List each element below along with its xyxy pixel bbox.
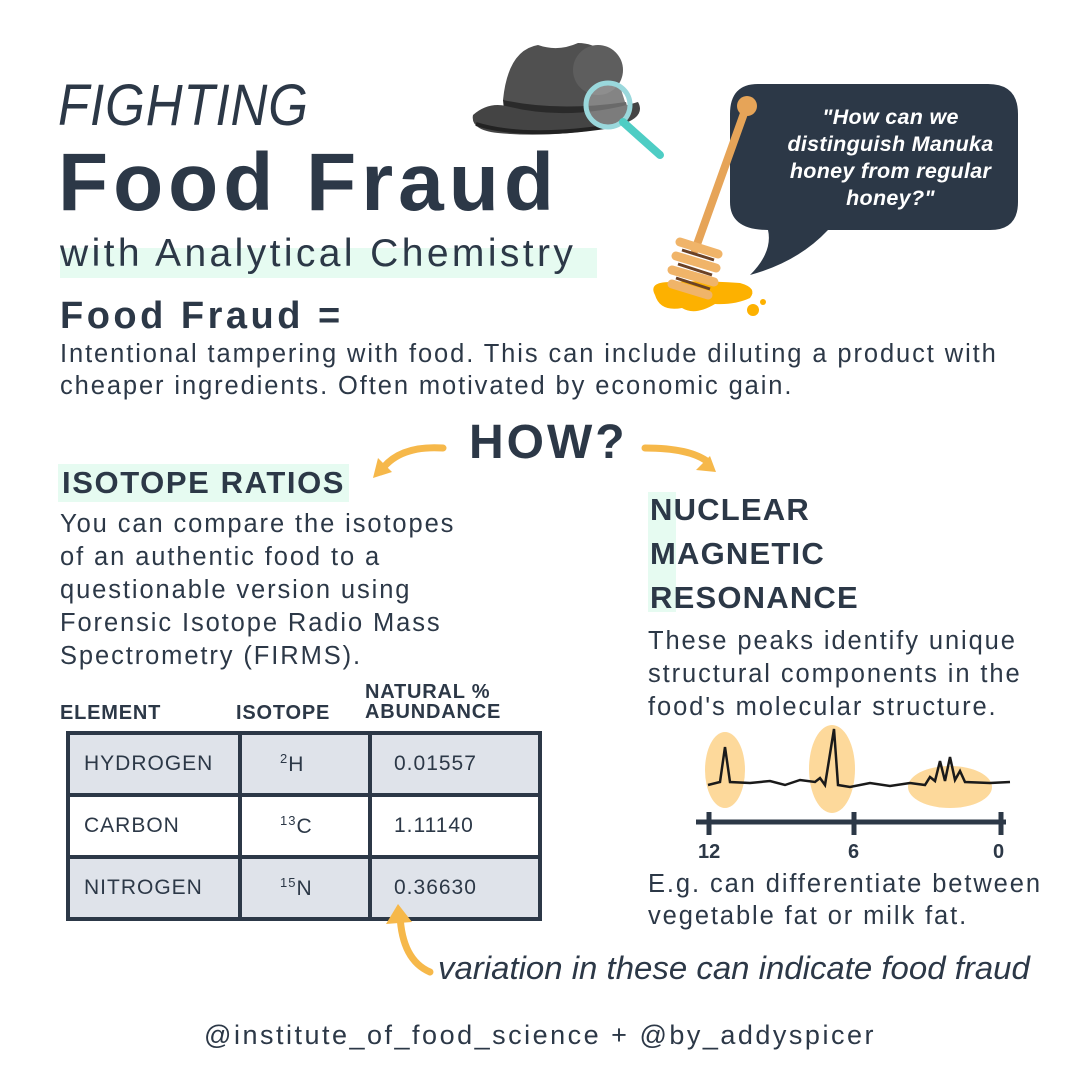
title: food fraud: Food Fraud [58, 137, 559, 228]
heading: NMR [648, 492, 859, 615]
isotope table: 0.36630 [394, 876, 477, 899]
chart: NMR spectrum: 6 [848, 841, 859, 863]
NMR text: These peaks identify unique structural components in the food's molecular structure. [648, 627, 1022, 721]
arrow: right [642, 444, 716, 472]
isotope table: HYDROGEN [84, 752, 213, 775]
heading: how: HOW? [469, 416, 628, 469]
NMR example text: E.g. can differentiate between vegetable fat or milk fat. [648, 870, 1042, 930]
isotope table: 1.11140 [394, 814, 474, 837]
icon: honey dipper [653, 96, 766, 316]
isotope table: CARBON [84, 814, 180, 837]
speech bubble [730, 84, 1018, 275]
isotope table: 0.01557 [394, 752, 477, 775]
table headers [60, 681, 501, 724]
arrow: to table [386, 904, 434, 976]
footer credits: @institute_of_food_science + @by_addyspicer [204, 1020, 876, 1050]
chart: NMR spectrum [696, 725, 1010, 863]
definition text: Intentional tampering with food. This can include diluting a product with cheaper ingredients. Often motivated by economic gain. [60, 340, 998, 400]
isotope table: 2H [280, 751, 304, 776]
isotope table [66, 731, 542, 921]
chart: NMR spectrum: 12 [698, 841, 720, 863]
isotope text: You can compare the isotopes of an authentic food to a questionable version using Forensic Isotope Radio Mass Spectrometry (FIRMS). [60, 510, 455, 670]
icon: detective hat with magnifier [472, 43, 664, 159]
heading: NMR: RESONANCE [650, 580, 859, 615]
isotope table: 15N [280, 875, 313, 900]
heading: food fraud definition: Food Fraud = [60, 295, 344, 337]
isotope table: 13C [280, 813, 313, 838]
table headers: ABUNDANCE [365, 701, 501, 723]
heading: isotope ratios: ISOTOPE RATIOS [62, 465, 345, 500]
speech bubble: "How can we distinguish Manuka honey from regular honey?" [787, 105, 994, 210]
title: fighting: FIGHTING [58, 73, 309, 138]
heading: NMR: NUCLEAR [650, 492, 810, 527]
table headers: ISOTOPE [236, 702, 330, 724]
chart: NMR spectrum: 0 [993, 841, 1004, 863]
subtitle: with Analytical Chemistry [60, 232, 576, 275]
isotope table: NITROGEN [84, 876, 203, 899]
heading: NMR: MAGNETIC [650, 536, 825, 571]
callout: variation: variation in these can indicate food fraud [438, 950, 1030, 986]
arrow: left [373, 444, 446, 478]
table headers: ELEMENT [60, 702, 161, 724]
table headers: NATURAL % [365, 681, 490, 703]
